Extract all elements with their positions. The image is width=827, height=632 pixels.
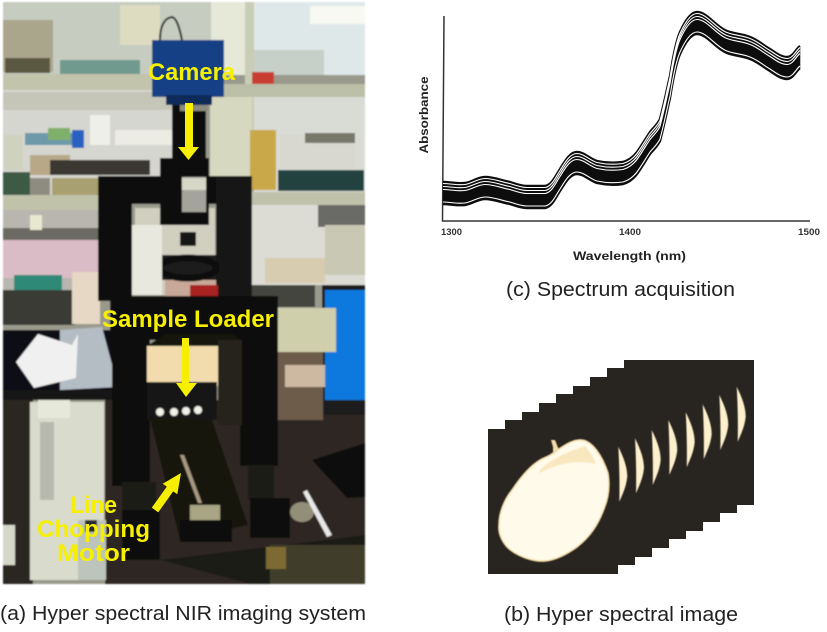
panel: hyper spectral image stack [488, 360, 754, 574]
lower black frame [110, 296, 278, 486]
label: Line Chopping Motor: Chopping [37, 516, 150, 543]
chart axes [442, 16, 810, 221]
arrow: sample loader down [176, 338, 197, 397]
monitor and cables [278, 285, 365, 420]
keyboard and pen [290, 443, 365, 537]
spectral slices [618, 387, 746, 502]
x-axis tick labels: 1300 [441, 227, 462, 238]
spectral curves band [443, 12, 800, 208]
arrow: motor diagonal [152, 473, 181, 512]
sample stage and rail [122, 406, 290, 560]
middle shelf clutter [3, 90, 365, 195]
y-axis title: Absorbance [417, 76, 431, 154]
top shelf background [3, 2, 365, 177]
stacked image frames [488, 360, 754, 574]
x-axis tick labels [441, 227, 820, 238]
sample cross-section [499, 440, 609, 561]
label: Line Chopping Motor: Line [70, 492, 117, 519]
lower left and right background [3, 205, 365, 325]
left tray and paper [3, 327, 119, 400]
x-axis title: Wavelength (nm) [573, 249, 686, 263]
caption: panel a: (a) Hyper spectral NIR imaging system [0, 603, 366, 625]
shelf boards [3, 74, 365, 210]
camera body [152, 17, 224, 160]
label: Camera: Camera [148, 59, 236, 86]
x-axis tick labels: 1400 [619, 227, 641, 238]
table surface [3, 400, 365, 584]
label: Sample Loader: Sample Loader [102, 306, 274, 333]
panel: spectrum chart [417, 12, 820, 263]
x-axis tick labels: 1500 [798, 227, 820, 238]
label: Line Chopping Motor [37, 492, 150, 567]
label: Line Chopping Motor: Motor [57, 540, 130, 567]
desktop computer [30, 400, 106, 580]
arrow: camera down [178, 103, 199, 160]
upper black frame [98, 158, 252, 301]
caption: panel c: (c) Spectrum acquisition [506, 279, 735, 301]
panel: hyper spectral NIR imaging system photo [3, 2, 365, 584]
caption: panel b: (b) Hyper spectral image [504, 604, 738, 626]
